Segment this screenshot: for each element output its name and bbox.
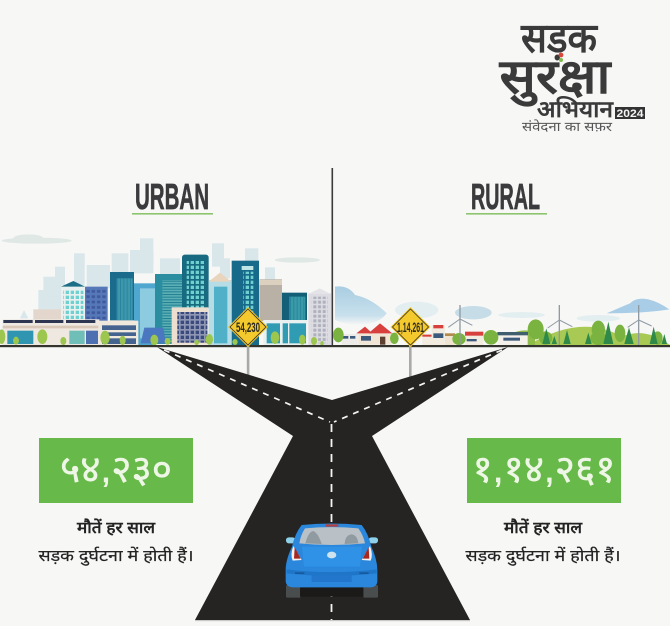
- sign: 54,230: [228, 307, 268, 347]
- green stat box: urban: [39, 438, 193, 503]
- caption: urban: मौतें हर साल: [76, 518, 156, 537]
- logo: Sadak Suraksha Abhiyan 2024: संवेदना का सफ़र: [522, 119, 613, 134]
- caption: rural: सड़क दुर्घटना में होती हैं।: [466, 546, 620, 566]
- illustration: urban skyline: [0, 234, 331, 346]
- heading: RURAL: [466, 176, 547, 217]
- caption: rural: मौतें हर साल: [503, 518, 583, 537]
- low long building: [3, 319, 99, 345]
- logo: Sadak Suraksha Abhiyan 2024: सुरक्षा: [498, 51, 612, 107]
- logo: Sadak Suraksha Abhiyan 2024: 2024: [616, 108, 644, 120]
- logo: Sadak Suraksha Abhiyan 2024: अभियान: [537, 95, 614, 122]
- sign: 1,14,261: [390, 307, 430, 347]
- icon: blue car rear view: [286, 523, 378, 598]
- foreground towers: [33, 309, 72, 320]
- hills: [528, 327, 670, 345]
- green stat box: urban: ५४,२३०: [60, 449, 172, 491]
- caption: urban: सड़क दुर्घटना में होती हैं।: [38, 546, 194, 566]
- faded background towers: [20, 238, 275, 320]
- street trees: [0, 329, 324, 346]
- illustration: rural landscape: [333, 286, 670, 345]
- heading: URBAN: URBAN: [135, 176, 209, 217]
- green stat box: rural: १,१४,२६१: [472, 449, 616, 491]
- center divider line: [332, 168, 333, 346]
- caption: urban: [38, 518, 194, 566]
- trees: [333, 319, 663, 345]
- forked road: [157, 347, 508, 621]
- green stat box: rural: [467, 438, 621, 503]
- houses: [342, 323, 528, 345]
- logo: Sadak Suraksha Abhiyan 2024: सड़क: [520, 15, 598, 61]
- logo: Sadak Suraksha Abhiyan 2024: [498, 15, 645, 134]
- solar panel: [141, 328, 166, 343]
- sign pole: urban: [247, 342, 249, 376]
- pale clouds: [2, 234, 320, 263]
- sign pole: rural: [409, 342, 412, 377]
- heading: RURAL: RURAL: [471, 176, 540, 217]
- ground line: [0, 345, 670, 347]
- heading: URBAN: [132, 176, 213, 217]
- sign: 1,14,261: 1,14,261: [397, 319, 424, 335]
- wind turbines: [448, 305, 652, 345]
- caption: rural: [466, 518, 620, 566]
- sign: 54,230: 54,230: [236, 319, 260, 335]
- mid-rise: [172, 307, 208, 345]
- clouds: [335, 286, 387, 325]
